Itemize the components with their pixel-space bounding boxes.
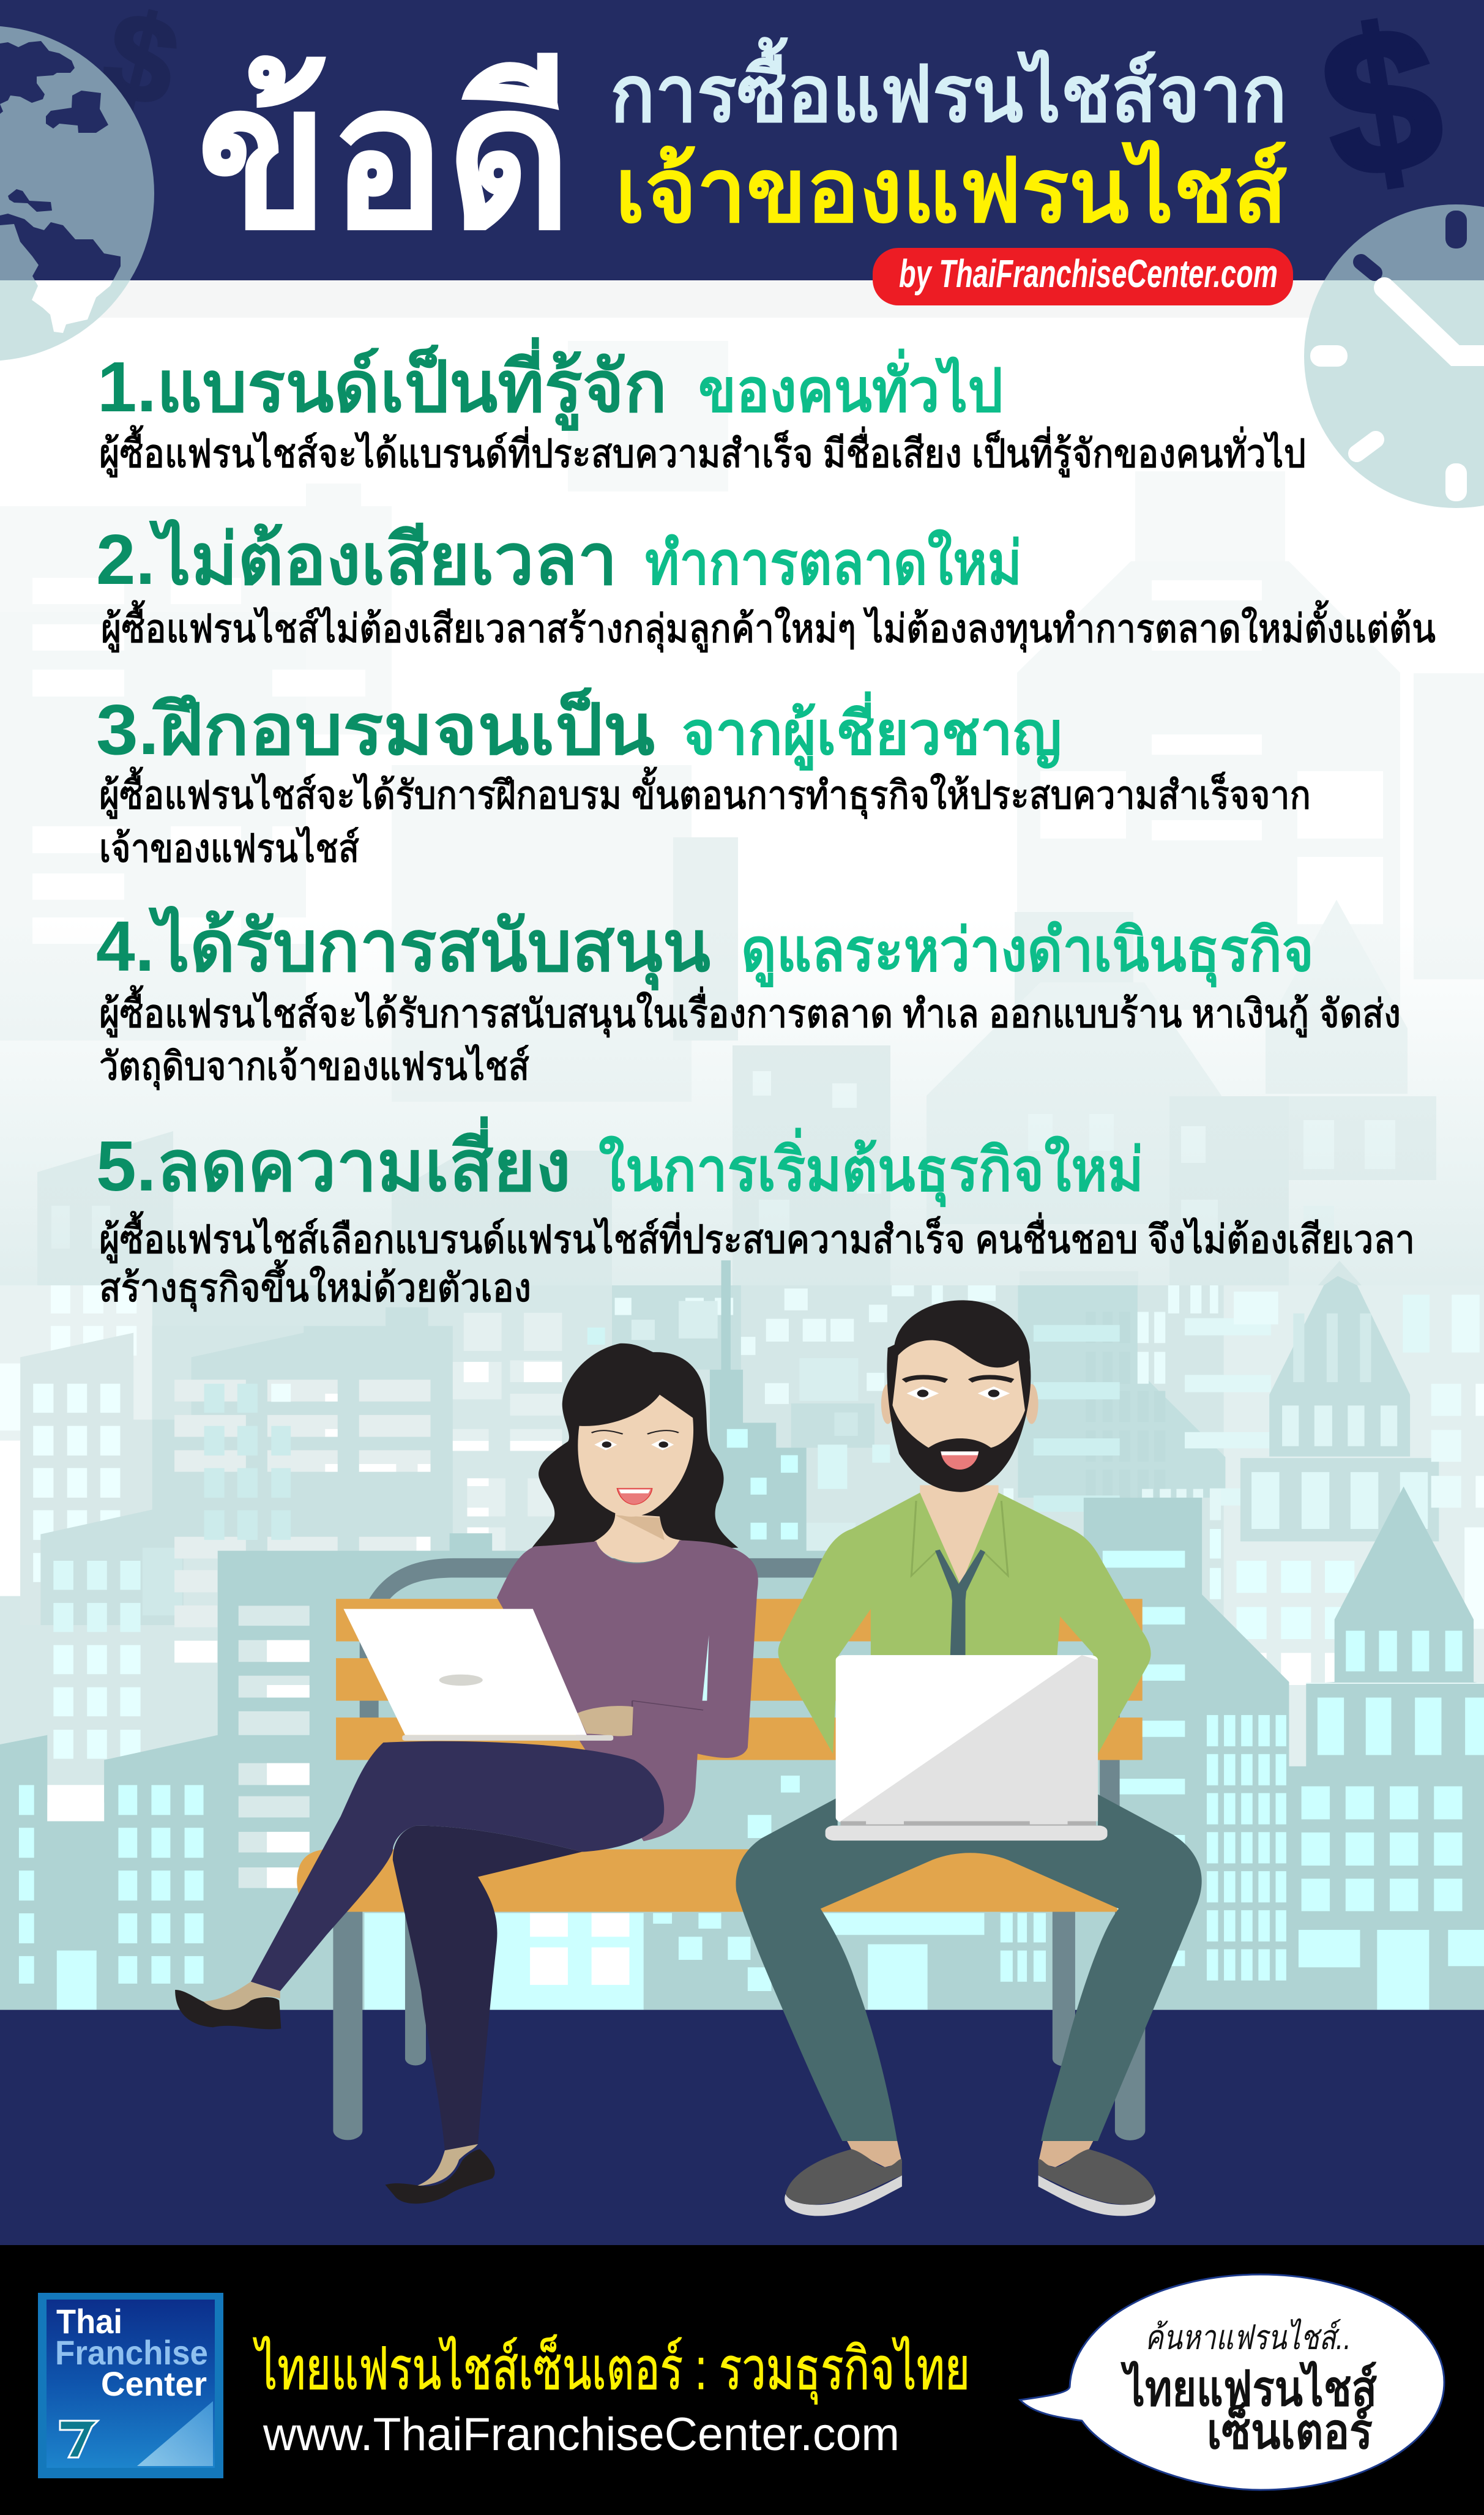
hair [528,1343,738,1554]
section 4 body [99,985,1401,1090]
speech bubble [1020,2274,1444,2490]
title: line one: การซื้อแฟรนไชส์จาก [610,37,1287,138]
header pale band [0,280,1484,318]
bench rear legs [405,1911,1075,2066]
foreground scene [0,1260,1484,2247]
section 4 heading: 4.ได้รับการสนับสนุน [96,906,710,990]
icon: logo arrow [60,2421,98,2457]
footer band [0,2245,1484,2515]
section 1 heading: 1.แบรนด์เป็นที่รู้จัก [97,337,667,431]
trousers [736,1795,1202,2141]
bench slats [336,1599,1143,1760]
section 1 body: ผู้ซื้อแฟรนไชส์จะได้แบรนด์ที่ประสบความสำเร็จ มีชื่อเสียง เป็นที่รู้จักของคนทั่วไป [99,425,1306,477]
title: line two: เจ้าของแฟรนไชส์ [615,140,1287,241]
background cityscape [0,341,1484,1785]
section 2 [96,519,1436,652]
eyes [907,1386,1010,1400]
neck [920,1485,999,1591]
section 1 subheading: ของคนทั่วไป [698,348,1003,424]
woman figure [175,1343,758,2203]
man figure [736,1300,1202,2216]
section 5 body [99,1211,1415,1312]
credit badge [873,248,1293,305]
bench seat [297,1849,1119,1911]
title [196,37,1287,270]
hair and beard [887,1300,1031,1492]
icon: clock [1297,202,1484,514]
eyes [594,1439,674,1450]
section 2 heading: 2.ไม่ต้องเสียเวลา [96,519,617,599]
logo: Thai [56,2302,122,2341]
bubble bold text: ไทยแฟรนไชส์ [1120,2360,1377,2416]
right shoe [1038,2141,1155,2216]
mouth [941,1451,979,1470]
face [892,1340,1025,1448]
mid buildings, right half [612,1276,1484,1785]
section 3 body: เจ้าของแฟรนไชส์ [99,826,359,870]
section 5 body: สร้างธุรกิจขึ้นใหม่ด้วยตัวเอง [99,1260,531,1312]
bench posts [360,1642,1120,1847]
collar [911,1501,1008,1575]
raised foot [175,1982,281,2029]
section 3 [96,687,1311,870]
section 3 subheading: จากผู้เชี่ยวชาญ [682,691,1062,771]
section 3 body [99,767,1311,870]
floor [0,2010,1484,2247]
bubble bold text second line: เซ็นเตอร์ [1207,2402,1373,2459]
logo: Franchise [55,2333,208,2372]
section 1 [97,337,1306,477]
laptop [826,1655,1108,1840]
section 3 body: ผู้ซื้อแฟรนไชส์จะได้รับการฝึกอบรม ขั้นตอนการทำธุรกิจให้ประสบความสำเร็จจาก [99,767,1311,819]
section 5 [96,1116,1415,1312]
upper leg [251,1741,664,1991]
header band [0,0,1484,280]
shirt [778,1493,1151,1754]
mouth [617,1489,652,1504]
footer tagline: ไทยแฟรนไชส์เซ็นเตอร์ : รวมธุรกิจไทย [253,2334,970,2405]
sweater [497,1540,758,1841]
neck [594,1513,682,1563]
hand [577,1706,633,1736]
section 5 heading: 5.ลดความเสี่ยง [96,1116,571,1206]
foreground buildings [0,1260,1484,2010]
bubble small text: ค้นหาแฟรนไชส์.. [1145,2318,1351,2356]
bench back rail [369,1558,824,1599]
logo [38,2293,223,2478]
section 2 subheading: ทำการตลาดใหม่ [645,529,1022,597]
left shoe [785,2141,902,2216]
lower leg, crossed under [393,1826,582,2150]
section 5 subheading: ในการเริ่มต้นธุรกิจใหม่ [598,1127,1144,1208]
section 4 [96,906,1401,1090]
footer website: www.ThaiFranchiseCenter.com [263,2408,900,2461]
bench [297,1558,1145,2140]
icon: globe [0,26,154,361]
laptop [343,1609,613,1741]
logo: Center [101,2364,207,2403]
section 4 body: วัตถุดิบจากเจ้าของแฟรนไชส์ [99,1044,529,1090]
credit badge: by ThaiFranchiseCenter.com [899,252,1278,296]
far faint buildings [0,341,1484,1316]
title: main word: ข้อดี [196,44,572,270]
tie [935,1550,985,1655]
mid buildings, left half [0,1285,612,1785]
planted foot [385,2144,495,2203]
sleeve line [632,1701,703,1735]
ears [881,1384,895,1424]
section 3 heading: 3.ฝึกอบรมจนเป็น [96,687,655,769]
face [578,1395,693,1517]
bench front legs [333,1911,1145,2140]
section 4 subheading: ดูแลระหว่างดำเนินธุรกิจ [741,916,1314,988]
